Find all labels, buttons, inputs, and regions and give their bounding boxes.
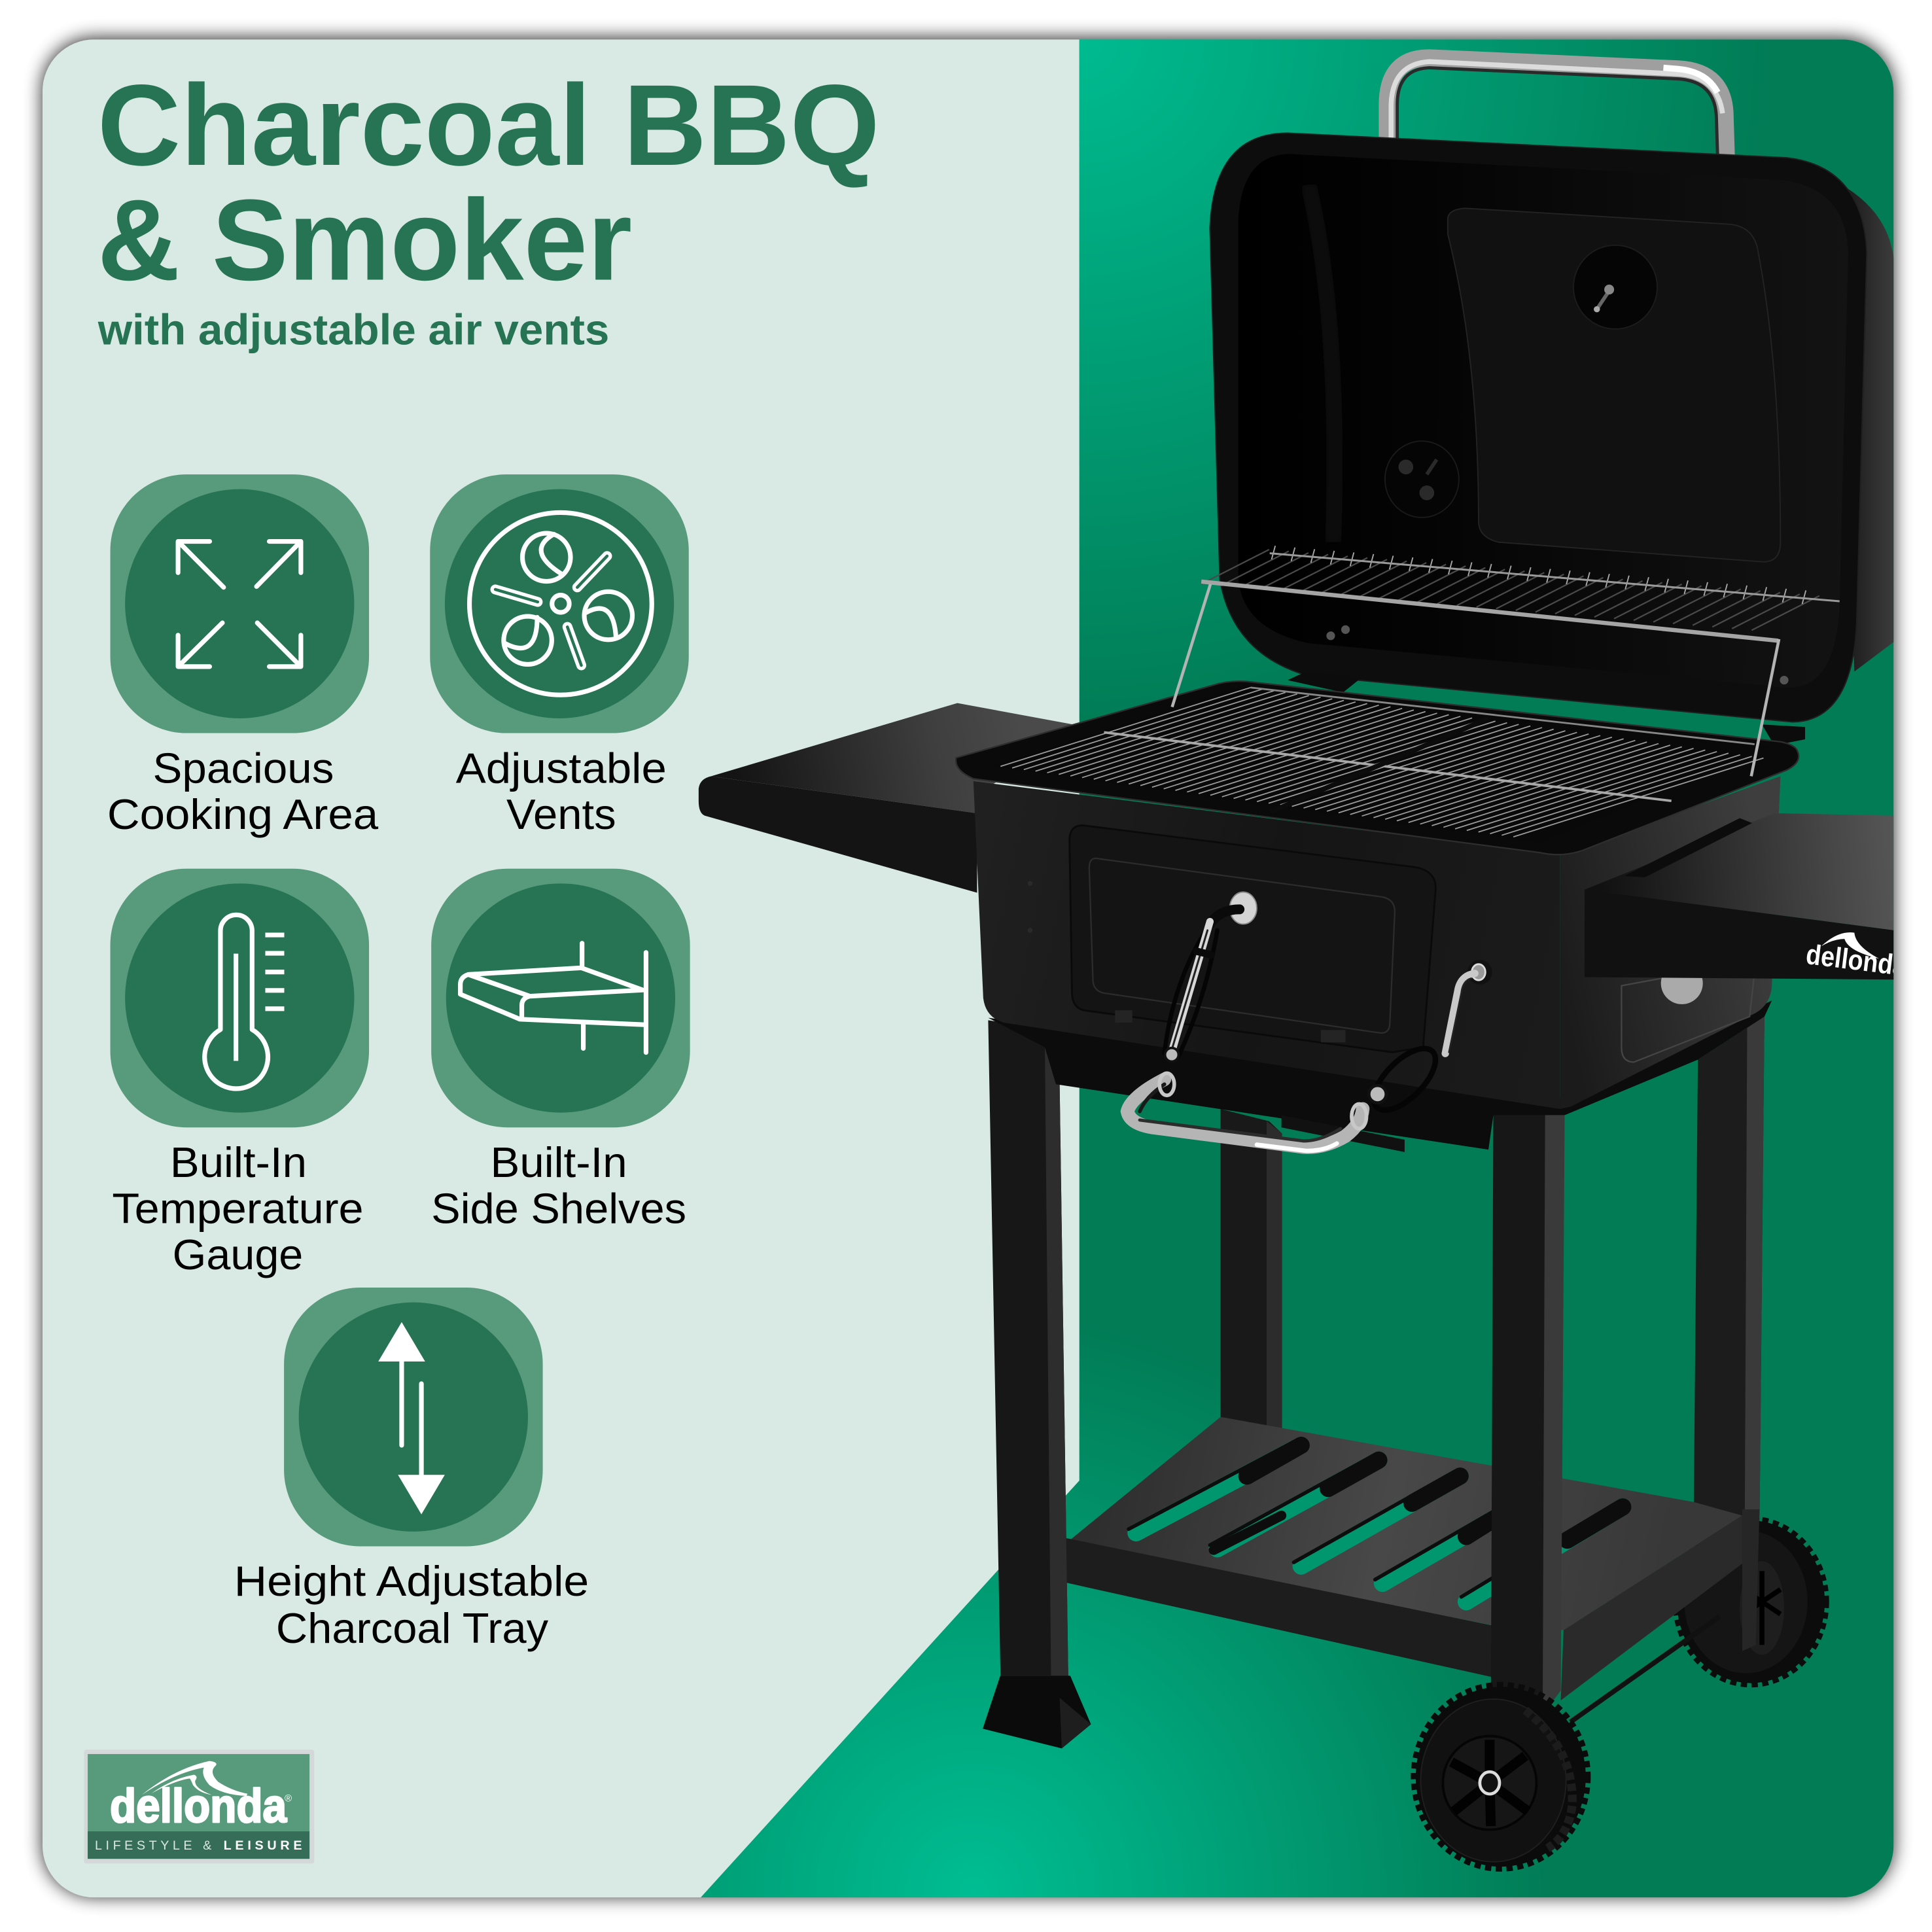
feature: temperature gauge: [111, 869, 369, 1278]
icon: up and down arrows: [284, 1288, 543, 1547]
grill: tray rim: [956, 681, 1799, 854]
grill: rack support wires: [1172, 584, 1779, 776]
lid: hinge bolts: [1326, 625, 1789, 684]
label: [234, 1557, 589, 1652]
label: Gauge: [173, 1231, 303, 1278]
product: charcoal grill: [699, 58, 1909, 1867]
registered mark: ®: [285, 1793, 292, 1804]
brand logo: [84, 1749, 314, 1863]
grill: body right face: [1560, 776, 1780, 1109]
body: side panel and dial: [1621, 961, 1756, 1062]
logo wave: [142, 1761, 247, 1796]
grill: rear leg lower: [1742, 1509, 1759, 1651]
label: [107, 744, 379, 838]
lid: inner left highlight: [1308, 184, 1335, 542]
logo strapline bold: LEISURE: [224, 1838, 302, 1853]
body: front door: [1028, 826, 1435, 1052]
label: Side Shelves: [431, 1185, 686, 1233]
label: [431, 1138, 686, 1233]
label: Adjustable: [456, 744, 667, 792]
grill: left front leg: [988, 1020, 1068, 1676]
grill: front wheel: [1416, 1687, 1586, 1867]
label: [112, 1138, 364, 1278]
grill: left side shelf: [699, 703, 1087, 892]
label: Built-In: [170, 1138, 307, 1186]
grill: axle: [1569, 1638, 1685, 1722]
label: Height Adjustable: [234, 1557, 589, 1605]
logo wordmark: dellonda: [110, 1780, 287, 1833]
panel: right green background: [701, 39, 1894, 1897]
subtitle: with adjustable air vents: [97, 305, 609, 353]
grill: lid hinges: [1288, 671, 1805, 745]
logo strapline light: LIFESTYLE &: [95, 1838, 211, 1853]
title: Charcoal BBQ: [97, 61, 880, 190]
grill: bracket under body: [988, 1000, 1772, 1152]
lid: air vent: [1385, 441, 1459, 518]
grill: right side shelf: [1585, 813, 1909, 983]
label: Temperature: [112, 1185, 364, 1233]
grill: lid back shell: [1837, 183, 1894, 671]
label: Built-In: [491, 1138, 627, 1186]
body: side air control: [1363, 960, 1492, 1120]
lid: inner plate: [1448, 208, 1780, 562]
lid: thermometer mount: [1573, 245, 1657, 329]
body: door handle: [1165, 892, 1257, 1061]
label: Vents: [506, 790, 616, 838]
shelf logo: dellonda: [1804, 939, 1909, 983]
grill: back legs: [1221, 1017, 1765, 1528]
label: Charcoal Tray: [276, 1604, 549, 1652]
icon: expand arrows: [111, 474, 369, 733]
label: [456, 744, 667, 838]
icon: thermometer: [111, 869, 369, 1127]
grill: rear wheel: [1677, 1520, 1825, 1683]
grill: right front leg: [1491, 1091, 1565, 1715]
title: & Smoker: [97, 177, 632, 305]
body: front silver handle: [1127, 1073, 1367, 1151]
grill: lid handle: [1388, 58, 1726, 156]
icon: shelf: [431, 869, 690, 1127]
icon: vent disc: [430, 474, 689, 733]
grill: cooking grate: [992, 685, 1769, 843]
grill: warming rack: [1201, 546, 1840, 641]
feature: spacious cooking area: [107, 474, 379, 838]
grill: lower shelf: [1052, 1417, 1742, 1700]
feature: height adjustable charcoal tray: [234, 1288, 589, 1652]
shelf slots: [1129, 1441, 1623, 1602]
feature: adjustable vents: [430, 474, 689, 838]
title: [97, 61, 880, 305]
grill: lid interior: [1238, 154, 1848, 688]
label: Cooking Area: [107, 790, 379, 838]
grill: open lid rim: [1210, 133, 1867, 722]
label: Spacious: [153, 744, 334, 792]
grill: body front face: [974, 781, 1560, 1109]
feature: side shelves: [431, 869, 690, 1233]
grill: left foot: [983, 1676, 1091, 1748]
